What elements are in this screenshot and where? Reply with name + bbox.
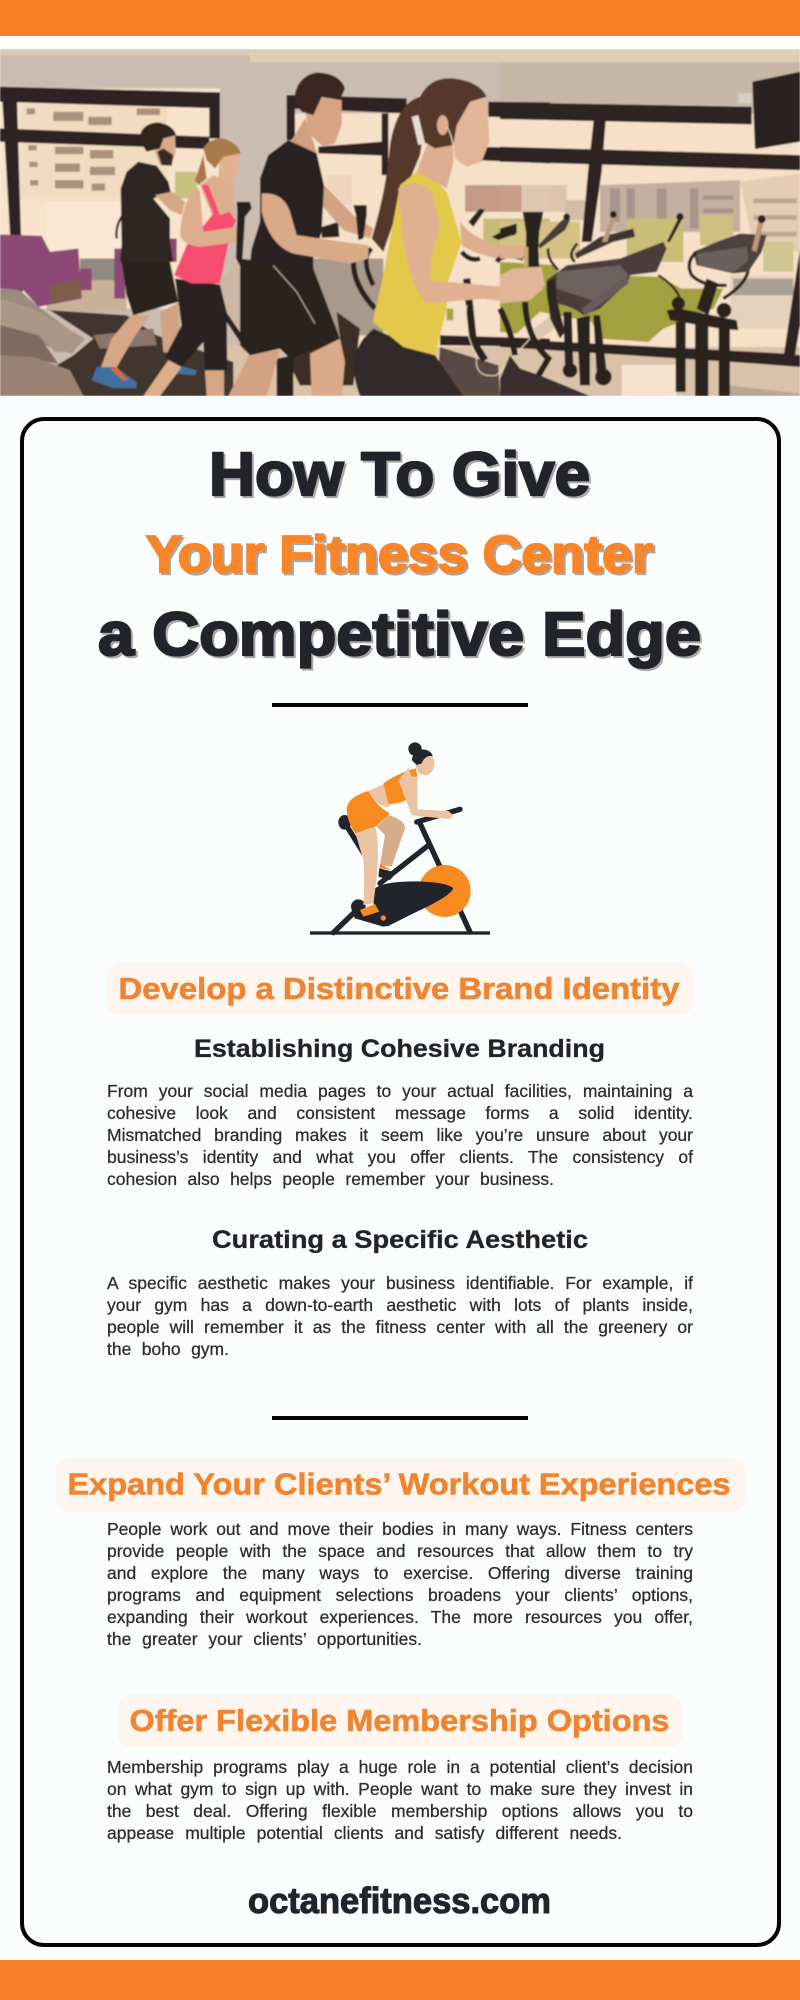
text block: membership paragraph: appease multiple potential clients and satisfy different needs. [107, 1823, 622, 1843]
title: Your Fitness Center [146, 526, 653, 584]
person: woman in pink top [143, 138, 252, 396]
machine behind the woman in yellow [437, 208, 517, 396]
subheading: Establishing Cohesive Branding: Establishing Cohesive Branding [194, 1035, 605, 1063]
text block: workout experiences paragraph: the greater your clients’ opportunities. [107, 1629, 422, 1649]
title [98, 440, 702, 672]
machines at lower left [0, 213, 247, 396]
text block: aesthetic paragraph: people will remember it as the fitness center with all the greenery or [107, 1317, 693, 1337]
icon: woman riding an exercise bike [310, 742, 490, 936]
person: man in black shirt [92, 122, 197, 388]
purple sofas [0, 235, 177, 307]
divider between sections [272, 1416, 528, 1420]
text block: workout experiences paragraph: and explore the many ways to exercise. Offering diverse training [107, 1563, 693, 1583]
text block: workout experiences paragraph: provide people with the space and resources that allow them to try [107, 1541, 693, 1561]
title: a Competitive Edge [98, 600, 701, 668]
band: pale gap below photo [0, 396, 800, 417]
heading pill: Develop a Distinctive Brand Identity [107, 962, 693, 1015]
heading pill: Expand Your Clients' Workout Experiences: Expand Your Clients’ Workout Experiences [68, 1466, 730, 1502]
person: woman in yellow top [354, 78, 543, 396]
text block: aesthetic paragraph: your gym has a down-to-earth aesthetic with lots of plants inside, [107, 1295, 693, 1315]
text block: membership paragraph: the best deal. Offering flexible membership options allows you to [107, 1801, 693, 1821]
heading pill: Expand Your Clients' Workout Experiences [56, 1457, 745, 1512]
website address: octanefitness.com [248, 1880, 551, 1921]
person: man in black shirt and shorts [228, 72, 375, 396]
text block: aesthetic paragraph: the boho gym. [107, 1339, 229, 1359]
photo: people training on elliptical machines in a gym [0, 49, 800, 396]
elliptical console, centre [533, 211, 684, 385]
text block: branding paragraph: Mismatched branding makes it seem like you’re unsure about your [107, 1125, 693, 1145]
text block: membership paragraph [107, 1757, 693, 1843]
divider under title [272, 703, 528, 707]
heading pill: Develop a Distinctive Brand Identity: Develop a Distinctive Brand Identity [118, 971, 680, 1006]
section: Offer Flexible Membership Options [107, 1695, 693, 1843]
heading pill: Offer Flexible Membership Options [117, 1695, 683, 1747]
text block: workout experiences paragraph [107, 1519, 694, 1649]
text block: aesthetic paragraph [106, 1273, 694, 1359]
band: white gap above photo [0, 36, 800, 49]
right windows with city view [287, 95, 800, 347]
foreground elliptical machine with handle [497, 212, 590, 396]
text block: branding paragraph: business’s identity and what you offer clients. The consistency of [107, 1147, 693, 1167]
subheading: Curating a Specific Aesthetic: Curating a Specific Aesthetic [212, 1226, 588, 1254]
text block: membership paragraph: on what gym to sign up with. People want to make sure they invest in [107, 1779, 693, 1799]
text block: membership paragraph: Membership programs play a huge role in a potential client’s decision [107, 1757, 693, 1777]
text block: workout experiences paragraph: programs and equipment selections broadens your clients’ options, [107, 1585, 693, 1605]
text block: branding paragraph [107, 1081, 694, 1189]
bottom orange bar [0, 1960, 800, 2000]
text block: branding paragraph: cohesion also helps people remember your business. [107, 1169, 554, 1189]
panel: main rounded card outline [20, 417, 781, 1947]
title: How To Give [209, 440, 590, 508]
text block: aesthetic paragraph: A specific aesthetic makes your business identifiable. For example, if [107, 1273, 693, 1293]
left window [0, 87, 220, 312]
text block: branding paragraph: cohesive look and consistent message forms a solid identity. [107, 1103, 693, 1123]
right panes, buildings, lime cloth and TV [500, 72, 800, 396]
room background: wall, ceiling and floor [0, 49, 800, 396]
text block: workout experiences paragraph: People work out and move their bodies in many ways. Fitness centers [107, 1519, 693, 1539]
elliptical machine, right [658, 215, 767, 396]
text block: workout experiences paragraph: expanding their workout experiences. The more resources you offer, [107, 1607, 693, 1627]
section: Develop a Distinctive Brand Identity [106, 962, 694, 1359]
heading pill: Offer Flexible Membership Options: Offer Flexible Membership Options [130, 1703, 670, 1738]
section: Expand Your Clients' Workout Experiences [56, 1457, 745, 1649]
top orange bar [0, 0, 800, 36]
text block: branding paragraph: From your social media pages to your actual facilities, maintaining a [107, 1081, 693, 1101]
